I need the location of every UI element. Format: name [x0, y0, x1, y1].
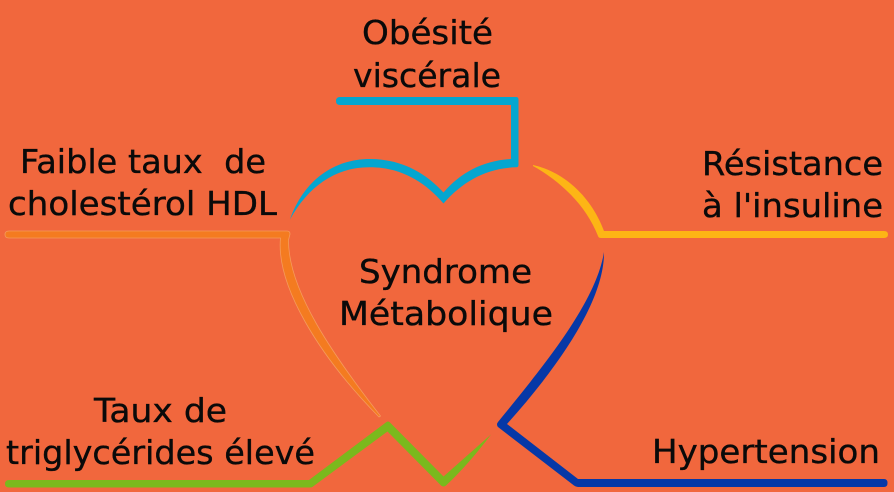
heart segment: high triglycerides connector (green) [5, 422, 491, 488]
label: low HDL cholesterol: cholestérol HDL [8, 184, 278, 223]
heart segment: visceral obesity connector (cyan) [290, 97, 518, 220]
center title: metabolic syndrome: Syndrome [359, 252, 532, 291]
label: insulin resistance [702, 144, 883, 225]
label: visceral obesity: viscérale [353, 56, 501, 95]
label: hypertension: Hypertension [652, 432, 880, 471]
label: low HDL cholesterol [8, 142, 278, 223]
heart segment: low HDL cholesterol connector (orange) [5, 231, 380, 417]
label: visceral obesity [353, 13, 501, 95]
label: high triglycerides [6, 391, 315, 472]
label: low HDL cholesterol: Faible taux de [20, 142, 266, 181]
label: insulin resistance: à l'insuline [702, 186, 883, 225]
label: high triglycerides: triglycérides élevé [6, 433, 315, 472]
center title: metabolic syndrome: Métabolique [339, 294, 553, 333]
heart segment: insulin resistance connector (yellow) [533, 165, 888, 238]
label: high triglycerides: Taux de [93, 391, 227, 430]
center title: metabolic syndrome [339, 252, 553, 333]
heart segment: hypertension connector (dark blue) [497, 252, 888, 487]
label: insulin resistance: Résistance [702, 144, 883, 183]
label: visceral obesity: Obésité [362, 13, 493, 52]
